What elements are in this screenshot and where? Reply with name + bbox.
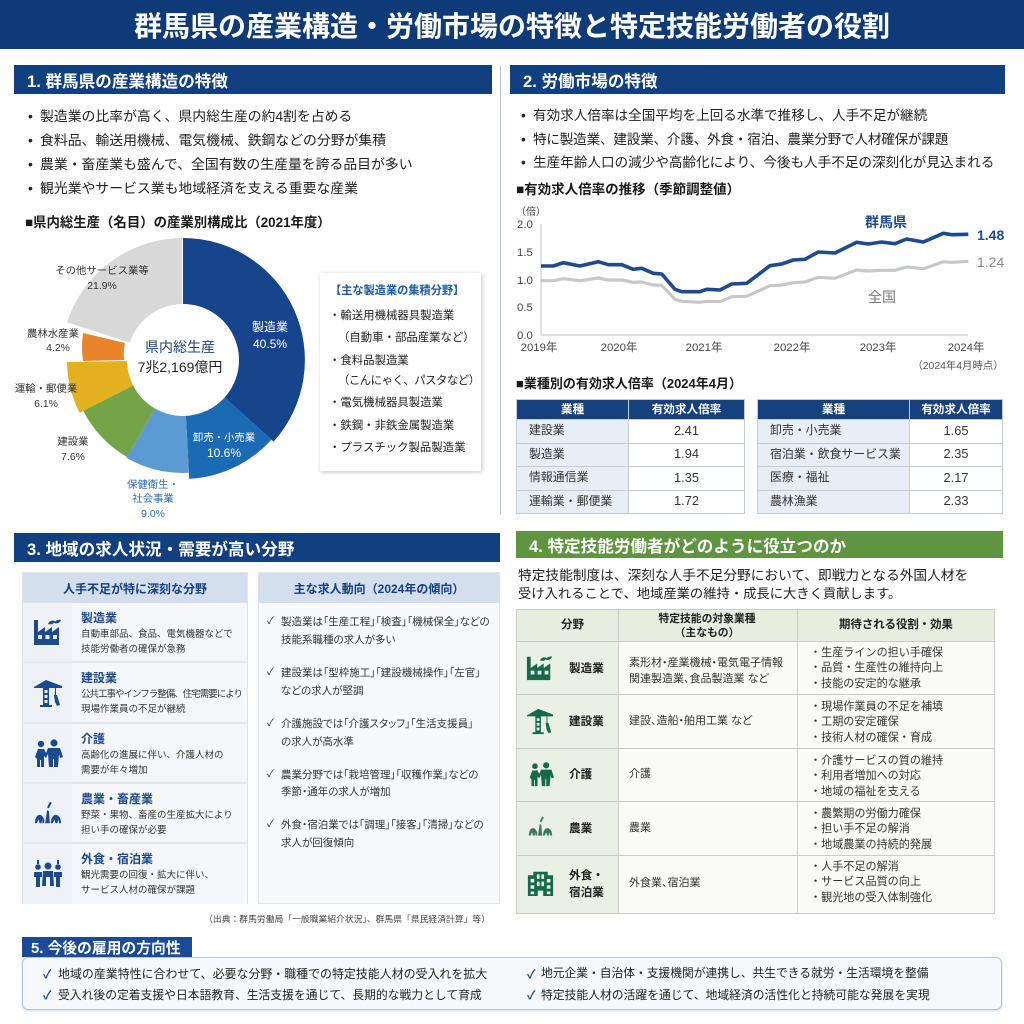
bullet list: section 1: 食料品、輸送用機械、電気機械、鉄鋼などの分野が集積 <box>40 132 386 148</box>
table: job ratio right: 卸売・小売業 <box>770 423 841 437</box>
panel heading <box>23 573 247 603</box>
bullet list: section 2: • <box>521 155 526 170</box>
row: manufacturing: 技能労働者の確保が急務 <box>81 644 186 655</box>
row: manufacturing: 自動車部品、食品、電気機器などで <box>81 629 233 640</box>
data labels: 21.9% <box>87 281 117 292</box>
wedge: agriculture <box>82 333 125 361</box>
data labels: 運輸・郵便業 <box>15 382 78 395</box>
line: national <box>541 261 968 302</box>
trend: food and lodging: 外食・宿泊業では「調理」「接客」「清掃」などの <box>281 819 484 831</box>
data labels: 9.0% <box>141 509 165 520</box>
directions box: ✓ <box>527 988 536 1002</box>
panel: section 2 <box>510 65 1005 170</box>
target industries: 関連製造業、食品製造業 など <box>629 672 769 684</box>
data labels: 保健衛生・ <box>127 478 179 491</box>
table: specified skilled worker roles: （主なもの） <box>675 627 739 639</box>
row: food and lodging: 観光需要の回復・拡大に伴い、 <box>81 870 214 881</box>
axis labels: 2.0 <box>517 219 533 231</box>
heading: section 4 <box>516 531 1003 558</box>
heading: section 1 <box>14 65 492 94</box>
axis labels: 2021年 <box>686 340 722 354</box>
table: specified skilled worker roles: 期待される役割・効果 <box>839 619 953 631</box>
table: job ratio right: 1.65 <box>944 423 968 438</box>
series labels: 群馬県 <box>865 214 907 230</box>
expected roles: ・利用者増加への対応 <box>810 770 921 782</box>
directions box <box>22 957 1002 1010</box>
expected roles: ・地域の福祉を支える <box>810 786 921 798</box>
directions box: ✓ <box>43 988 52 1002</box>
series labels: 全国 <box>868 289 896 305</box>
table: job ratio left <box>516 399 745 514</box>
table: job ratio left: 運輸業・郵便業 <box>529 494 612 508</box>
directions box: ✓ <box>43 967 52 981</box>
row: construction <box>23 663 247 724</box>
row: nursing care: 需要が年々増加 <box>81 765 148 776</box>
axes <box>541 224 968 335</box>
expected roles: ・介護サービスの質の維持 <box>810 755 943 767</box>
wedge: other services <box>67 238 182 343</box>
data labels: 6.1% <box>34 399 58 410</box>
callout: main manufacturing clusters: ・輸送用機械器具製造業 <box>329 310 454 322</box>
table: job ratio left: 製造業 <box>529 447 565 461</box>
row: construction: 公共工事やインフラ整備、住宅需要により <box>81 689 242 700</box>
bullet list: section 1: • <box>28 108 33 124</box>
line: Gunma <box>541 233 968 292</box>
data labels: 4.2% <box>46 343 70 354</box>
data labels: 10.6% <box>207 446 241 460</box>
series labels: 1.24 <box>977 254 1004 270</box>
directions box: 地域の産業特性に合わせて、必要な分野・職種での特定技能人材の受入れを拡大 <box>58 967 487 981</box>
series labels: 1.48 <box>977 227 1004 243</box>
row: nursing care: 高齢化の進展に伴い、介護人材の <box>81 750 224 761</box>
donut chart: GDP composition <box>15 238 305 520</box>
expected roles: ・技術人材の確保・育成 <box>810 732 932 744</box>
bullet list: section 1: 製造業の比率が高く、県内総生産の約4割を占める <box>40 108 352 124</box>
directions box: 受入れ後の定着支援や日本語教育、生活支援を通じて、長期的な戦力として育成 <box>58 988 482 1002</box>
callout: main manufacturing clusters: ・プラスチック製品製造業 <box>329 442 465 454</box>
panel: job trends <box>258 572 500 904</box>
trend: nursing care: ✓ <box>267 718 274 729</box>
table: job ratio right: 宿泊業・飲食サービス業 <box>770 447 901 461</box>
wedge: wholesale and retail <box>186 398 271 479</box>
callout: main manufacturing clusters: 【主な製造業の集積分野】 <box>330 285 464 297</box>
data labels: 卸売・小売業 <box>193 431 256 444</box>
source note: （出典：群馬労働局「一般職業紹介状況」、群馬県「県民経済計算」等） <box>204 914 490 924</box>
row: agriculture <box>23 784 247 844</box>
table: specified skilled worker roles <box>516 609 995 914</box>
field labels: 建設業 <box>569 715 604 728</box>
trend: construction: ✓ <box>267 667 274 678</box>
trend: food and lodging <box>267 819 484 849</box>
expected roles: ・工期の安定確保 <box>810 716 899 728</box>
intro text: section 4 <box>518 568 968 601</box>
trend: nursing care <box>267 718 473 748</box>
axis labels: 2023年 <box>860 340 896 354</box>
axis labels: 2024年 <box>948 340 984 354</box>
data labels <box>15 264 288 520</box>
field labels: 介護 <box>569 768 592 781</box>
axis labels: （倍） <box>516 206 546 218</box>
panel heading: 人手不足が特に深刻な分野 <box>63 582 207 596</box>
expected roles: ・人手不足の解消 <box>810 861 899 873</box>
expected roles: ・現場作業員の不足を補填 <box>810 701 943 713</box>
axis labels <box>516 206 984 354</box>
callout: main manufacturing clusters: （自動車・部品産業など） <box>338 332 475 344</box>
trend: manufacturing: 技能系職種の求人が多い <box>281 634 395 646</box>
table: job ratio right: 医療・福祉 <box>770 470 829 484</box>
field labels: 製造業 <box>569 662 604 675</box>
row: nursing care: 介護 <box>81 732 105 746</box>
table: job ratio right: 農林漁業 <box>770 494 818 508</box>
table: job ratio right: 2.17 <box>944 470 968 485</box>
field labels: 宿泊業 <box>569 886 604 899</box>
bullet list: section 1 <box>28 108 413 196</box>
heading: section 3 <box>14 533 500 562</box>
bullet list: section 1: 農業・畜産業も盛んで、全国有数の生産量を誇る品目が多い <box>40 156 413 172</box>
heading: section 5: 5. 今後の雇用の方向性 <box>31 940 181 956</box>
bullet list: section 2: • <box>521 108 526 123</box>
callout: main manufacturing clusters: ・食料品製造業 <box>329 355 409 367</box>
center label: 県内総生産 <box>145 339 215 355</box>
target industries: 素形材・産業機械・電気電子情報 <box>629 657 783 669</box>
expected roles <box>810 646 943 904</box>
table: job ratio left: 1.72 <box>674 493 699 508</box>
axis labels: 2019年 <box>521 340 557 354</box>
axis labels: 0.0 <box>517 330 533 342</box>
panel: section 5 <box>21 937 1003 1012</box>
trend: manufacturing: 製造業は「生産工程」「検査」「機械保全」などの <box>281 616 490 628</box>
row: construction: 現場作業員の不足が継続 <box>81 704 186 715</box>
trend: food and lodging: 求人が回復傾向 <box>281 837 354 849</box>
expected roles: ・サービス品質の向上 <box>810 876 921 888</box>
heading: section 4: 4. 特定技能労働者がどのように役立つのか <box>529 536 846 556</box>
panel heading <box>259 573 499 603</box>
title <box>0 0 1024 49</box>
table: job ratio left: 1.94 <box>674 446 699 461</box>
row: construction: 建設業 <box>81 671 117 685</box>
table: job ratio right: 有効求人倍率 <box>921 403 991 416</box>
expected roles: ・観光地の受入体制強化 <box>810 892 932 904</box>
trend: agriculture: 農業分野では「栽培管理」「収穫作業」などの <box>281 769 478 781</box>
bullet list: section 2: • <box>521 132 526 147</box>
panel: shortage fields <box>22 572 248 904</box>
field labels <box>569 662 604 899</box>
series labels: （2024年4月時点） <box>912 359 1004 372</box>
callout: main manufacturing clusters: （こんにゃく、パスタなど） <box>338 375 480 387</box>
data labels: 製造業 <box>252 320 288 334</box>
axis labels: 1.0 <box>517 275 533 287</box>
bullet list: section 1: 観光業やサービス業も地域経済を支える重要な産業 <box>40 180 358 196</box>
bullet list: section 1: • <box>28 156 33 172</box>
bullet list: section 2: 有効求人倍率は全国平均を上回る水準で推移し、人手不足が継続 <box>533 108 927 123</box>
table: job ratio left: 建設業 <box>529 423 565 437</box>
icon: farm <box>528 816 552 836</box>
trend: nursing care: 介護施設では「介護スタッフ」「生活支援員」 <box>281 718 473 730</box>
icon: factory <box>526 656 552 680</box>
expected roles: ・担い手不足の解消 <box>810 823 910 835</box>
panel heading: 主な求人動向（2024年の傾向） <box>294 582 464 596</box>
table: job ratio right: 2.35 <box>944 446 968 461</box>
trend: agriculture: ✓ <box>267 769 274 780</box>
row: manufacturing <box>23 603 247 663</box>
heading: section 2 <box>510 65 1005 94</box>
series labels <box>865 214 1004 372</box>
target industries: 建設、造船・舶用工業 など <box>629 715 752 727</box>
bullet list: section 1: • <box>28 180 33 196</box>
trend: construction <box>267 667 480 697</box>
row: nursing care <box>23 724 247 784</box>
trend: manufacturing: ✓ <box>267 616 274 627</box>
row: manufacturing: 製造業 <box>81 611 117 625</box>
wedge: manufacturing <box>183 238 305 442</box>
axis labels: 2020年 <box>601 340 637 354</box>
data labels: 40.5% <box>253 337 287 351</box>
data labels: 7.6% <box>61 452 85 463</box>
heading: section 2: 2. 労働市場の特徴 <box>523 72 658 90</box>
heading: section 1: 1. 群馬県の産業構造の特徴 <box>27 72 228 90</box>
table: job ratio right <box>757 399 1003 514</box>
icon: crane <box>526 708 554 734</box>
table heading: job ratio by industry: ■業種別の有効求人倍率（2024年4月） <box>516 376 742 391</box>
axis labels: 0.5 <box>517 302 533 314</box>
icon: hotel <box>528 872 554 896</box>
target industries <box>629 656 783 889</box>
expected roles: ・生産ラインの担い手確保 <box>810 647 943 659</box>
trend: agriculture: 季節・通年の求人が増加 <box>281 786 391 798</box>
wedge: construction <box>83 385 155 457</box>
row: food and lodging: サービス人材の確保が課題 <box>81 885 195 896</box>
table: job ratio left: 2.41 <box>674 423 699 438</box>
title: 群馬県の産業構造・労働市場の特徴と特定技能労働者の役割 <box>134 10 890 42</box>
data labels: 建設業 <box>57 435 89 448</box>
data labels: その他サービス業等 <box>55 264 149 277</box>
callout: main manufacturing clusters: ・鉄鋼・非鉄金属製造業 <box>329 420 454 432</box>
bullet list: section 1: • <box>28 132 33 148</box>
row: food and lodging: 外食・宿泊業 <box>81 852 153 866</box>
expected roles: ・地域農業の持続的発展 <box>810 839 932 851</box>
row: agriculture: 農業・畜産業 <box>81 792 153 806</box>
table: job ratio right: 業種 <box>822 403 845 416</box>
trend: nursing care: の求人が高水準 <box>281 736 354 748</box>
axis labels: 1.5 <box>517 247 533 259</box>
data labels: 社会事業 <box>132 492 174 505</box>
target industries: 介護 <box>629 768 651 780</box>
center label <box>138 339 222 375</box>
target industries: 農業 <box>629 822 651 834</box>
trend: manufacturing <box>267 616 490 646</box>
trend: construction: などの求人が堅調 <box>281 685 363 697</box>
directions box: 特定技能人材の活躍を通じて、地域経済の活性化と持続可能な発展を実現 <box>541 988 930 1002</box>
data labels: 農林水産業 <box>27 327 80 340</box>
row: agriculture: 野菜・果物、畜産の生産拡大により <box>81 810 233 821</box>
bullet list: section 2: 生産年齢人口の減少や高齢化により、今後も人手不足の深刻化が見込まれる <box>533 155 994 170</box>
table: job ratio left: 1.35 <box>674 470 699 485</box>
chart heading: GDP composition: ■県内総生産（名目）の産業別構成比（2021年度） <box>25 215 331 230</box>
row: agriculture: 担い手の確保が必要 <box>81 825 167 836</box>
field labels: 農業 <box>569 822 592 835</box>
table: job ratio left: 業種 <box>561 403 584 416</box>
center label: 7兆2,169億円 <box>138 359 222 375</box>
directions box: 地元企業・自治体・支援機関が連携し、共生できる就労・生活環境を整備 <box>541 967 929 980</box>
trend: construction: 建設業は「型枠施工」「建設機械操作」「左官」 <box>281 667 480 679</box>
axis labels: 2022年 <box>774 340 810 354</box>
table: job ratio left: 有効求人倍率 <box>652 403 721 416</box>
heading: section 3: 3. 地域の求人状況・需要が高い分野 <box>27 540 294 558</box>
table: job ratio right: 2.33 <box>944 493 968 508</box>
intro text: section 4: 特定技能制度は、深刻な人手不足分野において、即戦力となる外国人材を <box>518 568 968 583</box>
line chart: job ratio trend <box>516 206 1004 372</box>
bullet list: section 2: 特に製造業、建設業、介護、外食・宿泊、農業分野で人材確保が課題 <box>533 132 948 147</box>
wedge: transport <box>67 361 133 413</box>
panel: section 1 <box>14 65 492 520</box>
callout: main manufacturing clusters <box>320 273 481 471</box>
intro text: section 4: 受け入れることで、地域産業の維持・成長に大きく貢献します。 <box>518 586 901 601</box>
trend: food and lodging: ✓ <box>267 819 274 830</box>
expected roles: ・品質・生産性の維持向上 <box>810 662 943 674</box>
column headers: 分野 <box>561 619 584 631</box>
directions box: ✓ <box>527 967 536 981</box>
target industries: 外食業、宿泊業 <box>629 877 700 889</box>
row: food and lodging <box>23 844 247 904</box>
trend: agriculture <box>267 769 478 798</box>
expected roles: ・農繁期の労働力確保 <box>810 808 921 820</box>
field labels: 外食・ <box>569 869 604 882</box>
wedge: health and social <box>126 408 189 473</box>
icon: people <box>530 762 554 786</box>
chart heading: job ratio trend: ■有効求人倍率の推移（季節調整値） <box>516 182 740 197</box>
bullet list: section 2 <box>521 108 994 170</box>
expected roles: ・技能の安定的な継承 <box>810 678 921 690</box>
callout: main manufacturing clusters: ・電気機械器具製造業 <box>329 397 443 409</box>
table: specified skilled worker roles: 特定技能の対象業種 <box>658 613 756 625</box>
table: job ratio left: 情報通信業 <box>529 470 588 484</box>
